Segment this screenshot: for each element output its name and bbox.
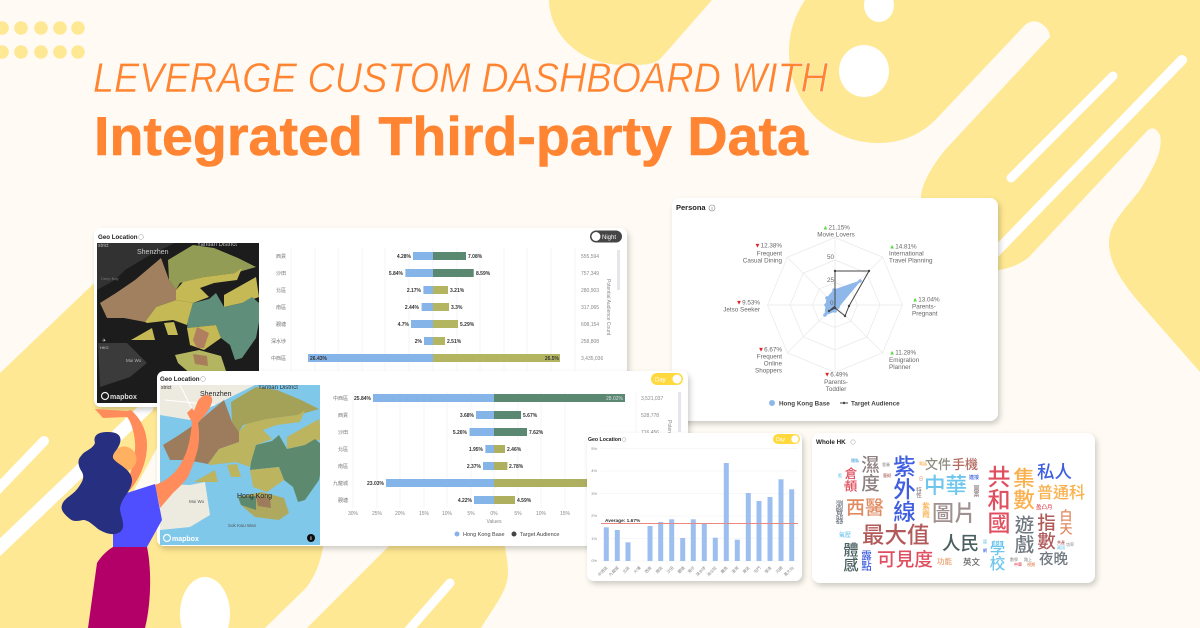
word cloud: 視頻 bbox=[1027, 561, 1035, 567]
day bar chart: 5% bbox=[514, 511, 522, 517]
illustration: dancing woman bbox=[62, 395, 212, 628]
radar chart: ▲11.28% bbox=[889, 350, 917, 356]
day bar chart: 528,778 bbox=[641, 413, 659, 419]
day bar chart: 北區 bbox=[338, 446, 348, 453]
word cloud: 圖片 bbox=[932, 501, 976, 526]
word cloud: 短訊 bbox=[844, 482, 852, 488]
night bar chart: 317,065 bbox=[581, 305, 599, 311]
column chart: 葵青 bbox=[763, 564, 773, 574]
word cloud: 氣壓 bbox=[839, 531, 851, 539]
night bar chart: 2.17% bbox=[407, 288, 422, 294]
word cloud: 共產 bbox=[1057, 539, 1065, 545]
panel: whole HK word cloud bbox=[812, 433, 1095, 583]
night map: Yantian District bbox=[197, 242, 237, 248]
day bar chart: 10% bbox=[442, 511, 453, 517]
night bar chart: 757,349 bbox=[581, 271, 599, 277]
night bar chart: 5.84% bbox=[389, 271, 404, 277]
day bar chart: 5% bbox=[467, 511, 475, 517]
word cloud bbox=[835, 455, 1085, 572]
night bar chart: Potential Audience Count bbox=[605, 279, 611, 336]
word cloud: 連接 bbox=[969, 474, 979, 481]
radar chart: Emigration bbox=[889, 357, 920, 364]
day bar chart: 九龍城 bbox=[333, 480, 348, 487]
day bar chart: 20% bbox=[395, 511, 406, 517]
day bar chart: 30% bbox=[348, 511, 359, 517]
day bar chart: 716,456 bbox=[641, 430, 659, 436]
day bar chart: 沙田 bbox=[338, 430, 348, 436]
column chart heading: Geo Location bbox=[588, 437, 621, 443]
day map: Yantian District bbox=[258, 385, 298, 391]
night bar chart: 2% bbox=[415, 339, 423, 345]
night bar chart bbox=[271, 248, 620, 371]
word cloud: 圖案 bbox=[972, 485, 979, 498]
word cloud: 網 bbox=[983, 547, 987, 553]
word cloud: 白天 bbox=[1058, 508, 1072, 535]
night map: mapbox bbox=[110, 394, 137, 401]
word cloud: 手機 bbox=[952, 457, 978, 472]
radar chart: ▲14.81% bbox=[889, 244, 917, 250]
word cloud: 功率 bbox=[1066, 541, 1074, 547]
day bar chart: 4.22% bbox=[458, 498, 473, 504]
day map: Shenzhen bbox=[200, 391, 232, 398]
word cloud: 隱私 bbox=[851, 457, 859, 463]
day map: Hong Kong bbox=[237, 493, 272, 500]
title: first line: LEVERAGE CUSTOM DASHBOARD WITH bbox=[93, 54, 829, 101]
word cloud: 集數 bbox=[1010, 467, 1034, 510]
word cloud: 共和國 bbox=[984, 465, 1010, 534]
radar chart: International bbox=[889, 250, 924, 258]
night bar chart: 280,903 bbox=[581, 288, 599, 294]
day panel legend: Target Audience bbox=[520, 532, 559, 538]
radar chart: ▼6.67% bbox=[758, 346, 782, 354]
day bar chart: 西貢 bbox=[338, 413, 348, 419]
night map: Shenzhen bbox=[137, 249, 169, 256]
radar chart: Casual Dining bbox=[743, 258, 782, 264]
word cloud: 藍 bbox=[838, 472, 842, 478]
night bar chart: 26.43% bbox=[310, 356, 328, 362]
radar chart: 25 bbox=[827, 277, 835, 284]
title: second line: Integrated Third-party Data bbox=[94, 105, 808, 167]
night bar chart: 7.08% bbox=[468, 254, 483, 260]
word cloud: 特性 bbox=[915, 486, 922, 499]
persona legend: Target Audience bbox=[851, 400, 900, 408]
word cloud: 遊戲 bbox=[1011, 515, 1034, 555]
column chart: 4% bbox=[591, 468, 597, 473]
night bar chart: 4.7% bbox=[398, 322, 410, 328]
column chart: 九龍城 bbox=[607, 564, 620, 577]
radar chart: Shoppers bbox=[755, 368, 782, 374]
column chart: 黃大仙 bbox=[782, 564, 795, 577]
word cloud: 資訊 bbox=[1057, 544, 1065, 550]
word cloud: 藝術 bbox=[883, 472, 891, 478]
night map: strict bbox=[98, 243, 109, 249]
column chart bbox=[591, 446, 798, 577]
word cloud: 雲量 bbox=[882, 461, 890, 467]
word cloud: 可見度 bbox=[877, 549, 933, 570]
word cloud: 日 bbox=[919, 476, 923, 481]
night map bbox=[97, 242, 259, 403]
word cloud: 功能 bbox=[937, 556, 952, 566]
column chart: 觀塘 bbox=[676, 564, 686, 574]
radar chart: 0 bbox=[830, 300, 834, 307]
day bar chart: 2.46% bbox=[507, 447, 522, 453]
night bar chart: 555,594 bbox=[581, 254, 599, 260]
column chart: 2% bbox=[591, 513, 597, 518]
figure right arm bbox=[155, 395, 212, 508]
day bar chart: 28.02% bbox=[606, 396, 624, 402]
word cloud: 中華 bbox=[1014, 561, 1022, 567]
day bar chart: 0% bbox=[490, 511, 498, 517]
radar chart: ▼6.49% bbox=[824, 372, 848, 378]
radar chart: ▼12.38% bbox=[754, 242, 782, 250]
day bar chart: 5.26% bbox=[453, 430, 468, 436]
night bar chart: 4.28% bbox=[397, 254, 412, 260]
icon: night panel info bbox=[139, 235, 143, 239]
column chart: Average: 1.67% bbox=[605, 518, 641, 524]
day panel heading: Geo Location bbox=[160, 376, 200, 383]
night bar chart: 26.5% bbox=[545, 356, 560, 362]
day bar chart: 10% bbox=[536, 511, 547, 517]
word cloud heading: Whole HK bbox=[816, 439, 846, 446]
night bar chart: 3.21% bbox=[450, 288, 465, 294]
day bar chart: 2.78% bbox=[509, 464, 524, 470]
day bar chart: 25% bbox=[372, 511, 383, 517]
night toggle bbox=[590, 230, 622, 242]
radar chart: Online bbox=[764, 360, 782, 368]
radar chart: Planner bbox=[889, 364, 911, 371]
column chart: 東區 bbox=[741, 564, 751, 574]
night bar chart: 中西區 bbox=[271, 355, 286, 362]
panel: night geo location bbox=[94, 228, 627, 407]
word cloud: 學校 bbox=[988, 540, 1005, 571]
figure face bbox=[112, 446, 136, 472]
day map: i bbox=[310, 536, 312, 542]
column chart: 灣仔 bbox=[686, 564, 696, 574]
day bar chart: 25.84% bbox=[354, 396, 372, 402]
word cloud: 倉頡 bbox=[842, 466, 857, 492]
night toggle: Night bbox=[602, 235, 616, 241]
word cloud: 濕度 bbox=[860, 455, 880, 492]
radar chart: ▲21.15% bbox=[822, 224, 850, 232]
radar chart: Travel Planning bbox=[889, 258, 933, 264]
panel: day geo location bbox=[157, 371, 688, 546]
word cloud: 路上 bbox=[1024, 556, 1032, 562]
column chart: 深水埗 bbox=[694, 564, 707, 577]
night panel heading: Geo Location bbox=[98, 234, 138, 241]
day bar chart: 3.68% bbox=[460, 413, 475, 419]
word cloud: 英文 bbox=[963, 557, 981, 567]
figure skirt bbox=[88, 547, 150, 628]
column chart toggle bbox=[773, 434, 800, 444]
day map: mapbox bbox=[172, 536, 199, 543]
persona heading: Persona bbox=[676, 203, 706, 212]
column chart: 西貢 bbox=[644, 565, 653, 574]
night bar chart: 3,435,036 bbox=[581, 356, 603, 362]
word cloud: 紫外線 bbox=[890, 455, 916, 523]
night bar chart: 沙田 bbox=[276, 271, 286, 277]
word cloud: 文件 bbox=[925, 457, 951, 472]
figure hair bbox=[62, 432, 132, 534]
radar chart: 50 bbox=[827, 254, 835, 261]
day toggle bbox=[651, 373, 683, 385]
day bar chart: 3,521,037 bbox=[641, 396, 663, 402]
word cloud: 體感 bbox=[842, 542, 858, 572]
day panel legend: Hong Kong Base bbox=[463, 532, 505, 538]
word cloud: 西醫 bbox=[846, 497, 884, 519]
persona legend bbox=[769, 400, 900, 408]
word cloud: 最大值 bbox=[862, 523, 930, 548]
word cloud: 夜晚 bbox=[1039, 550, 1068, 568]
night map: Deep Bay bbox=[101, 276, 119, 281]
night bar chart: 2.44% bbox=[405, 305, 420, 311]
column chart: 荃灣 bbox=[730, 564, 740, 574]
day map bbox=[160, 385, 322, 545]
day bar chart: 7.62% bbox=[529, 430, 544, 436]
day bar chart: Potential bbox=[666, 420, 672, 439]
column chart: 大埔 bbox=[632, 564, 642, 574]
word cloud: 瀏覽器 bbox=[835, 499, 844, 525]
panel: persona radar bbox=[672, 198, 998, 421]
word cloud: 指數 bbox=[1036, 513, 1056, 550]
day bar chart: 5.67% bbox=[523, 413, 538, 419]
column chart: 油尖旺 bbox=[705, 564, 718, 577]
night bar chart: 2.51% bbox=[447, 339, 462, 345]
word cloud: 語 bbox=[983, 538, 987, 544]
radar chart bbox=[723, 224, 940, 393]
night bar chart: 5.29% bbox=[460, 322, 475, 328]
day map: strict bbox=[161, 385, 172, 391]
day map: Sok Kwu Wan bbox=[228, 523, 257, 528]
day bar chart: 23.03% bbox=[367, 481, 385, 487]
word cloud: 電話 bbox=[919, 460, 927, 466]
word cloud: 盈凸月 bbox=[1036, 504, 1053, 511]
radar chart: Frequent bbox=[757, 354, 782, 360]
night bar chart: 南區 bbox=[276, 304, 286, 311]
day bar chart: 2.37% bbox=[467, 464, 482, 470]
night bar chart: 西貢 bbox=[276, 254, 286, 260]
radar chart: Frequent bbox=[757, 250, 782, 258]
day bar chart: Values bbox=[487, 519, 502, 525]
icon: persona info bbox=[709, 205, 715, 211]
night map: Mui Wo bbox=[126, 358, 142, 363]
night bar chart: 258,808 bbox=[581, 339, 599, 345]
column chart: 北區 bbox=[621, 564, 631, 574]
radar chart: ▼9.53% bbox=[736, 300, 760, 306]
word cloud: 紫霞 bbox=[922, 502, 930, 519]
day panel legend bbox=[454, 532, 559, 538]
icon: word cloud info bbox=[851, 440, 855, 444]
night bar chart: 觀塘 bbox=[276, 321, 286, 328]
night map: ✈ bbox=[102, 338, 106, 344]
column chart: 屯門 bbox=[752, 564, 762, 574]
figure torso bbox=[113, 484, 162, 547]
column chart: 元朗 bbox=[774, 564, 784, 574]
column chart: 中西區 bbox=[596, 564, 609, 577]
day bar chart: 15% bbox=[560, 511, 571, 517]
word cloud: 普通科 bbox=[1037, 484, 1085, 502]
figure left arm bbox=[95, 409, 147, 490]
word cloud: 中華 bbox=[924, 474, 967, 498]
column chart: 0% bbox=[591, 558, 597, 563]
day bar chart: 4.59% bbox=[517, 498, 532, 504]
word cloud: 私人 bbox=[1037, 462, 1072, 482]
persona legend: Hong Kong Base bbox=[779, 400, 830, 408]
word cloud: 人民 bbox=[942, 533, 979, 554]
radar chart: Pregnant bbox=[912, 310, 938, 318]
radar chart: ▲13.04% bbox=[912, 296, 940, 304]
word cloud: 露點 bbox=[860, 550, 872, 572]
night map: HKG bbox=[100, 345, 109, 350]
icon: day panel info bbox=[201, 377, 205, 381]
day toggle: Day bbox=[655, 378, 666, 384]
day bar chart: 中西區 bbox=[333, 395, 348, 402]
night bar chart: 深水埗 bbox=[271, 338, 286, 345]
day bar chart: 觀塘 bbox=[338, 497, 348, 504]
night bar chart: 北區 bbox=[276, 287, 286, 294]
column chart: 1% bbox=[591, 536, 597, 541]
radar chart: Parents- bbox=[912, 304, 936, 310]
column chart: 南區 bbox=[654, 564, 664, 574]
radar chart: Toddler bbox=[826, 386, 846, 393]
column chart: 離島 bbox=[719, 564, 729, 574]
day bar chart: 南區 bbox=[338, 463, 348, 470]
column chart: 5% bbox=[591, 446, 597, 451]
radar chart: Movie Lovers bbox=[817, 232, 855, 238]
column chart: 沙田 bbox=[666, 565, 675, 574]
night bar chart: 608,154 bbox=[581, 322, 599, 328]
column chart: 3% bbox=[591, 491, 597, 496]
column chart toggle: Day bbox=[776, 437, 785, 443]
word cloud: 數學 bbox=[1010, 556, 1018, 562]
icon: column chart info bbox=[622, 438, 626, 442]
day bar chart: 1.95% bbox=[469, 447, 484, 453]
night bar chart: 3.3% bbox=[451, 305, 463, 311]
night bar chart: 8.59% bbox=[476, 271, 491, 277]
day bar chart: 15% bbox=[419, 511, 430, 517]
radar chart: Parents- bbox=[824, 379, 848, 386]
radar chart: Jetso Seeker bbox=[723, 306, 760, 314]
day map: Mui Wo bbox=[189, 499, 205, 504]
day bar chart bbox=[333, 392, 681, 525]
panel: geo location column chart bbox=[587, 433, 802, 581]
